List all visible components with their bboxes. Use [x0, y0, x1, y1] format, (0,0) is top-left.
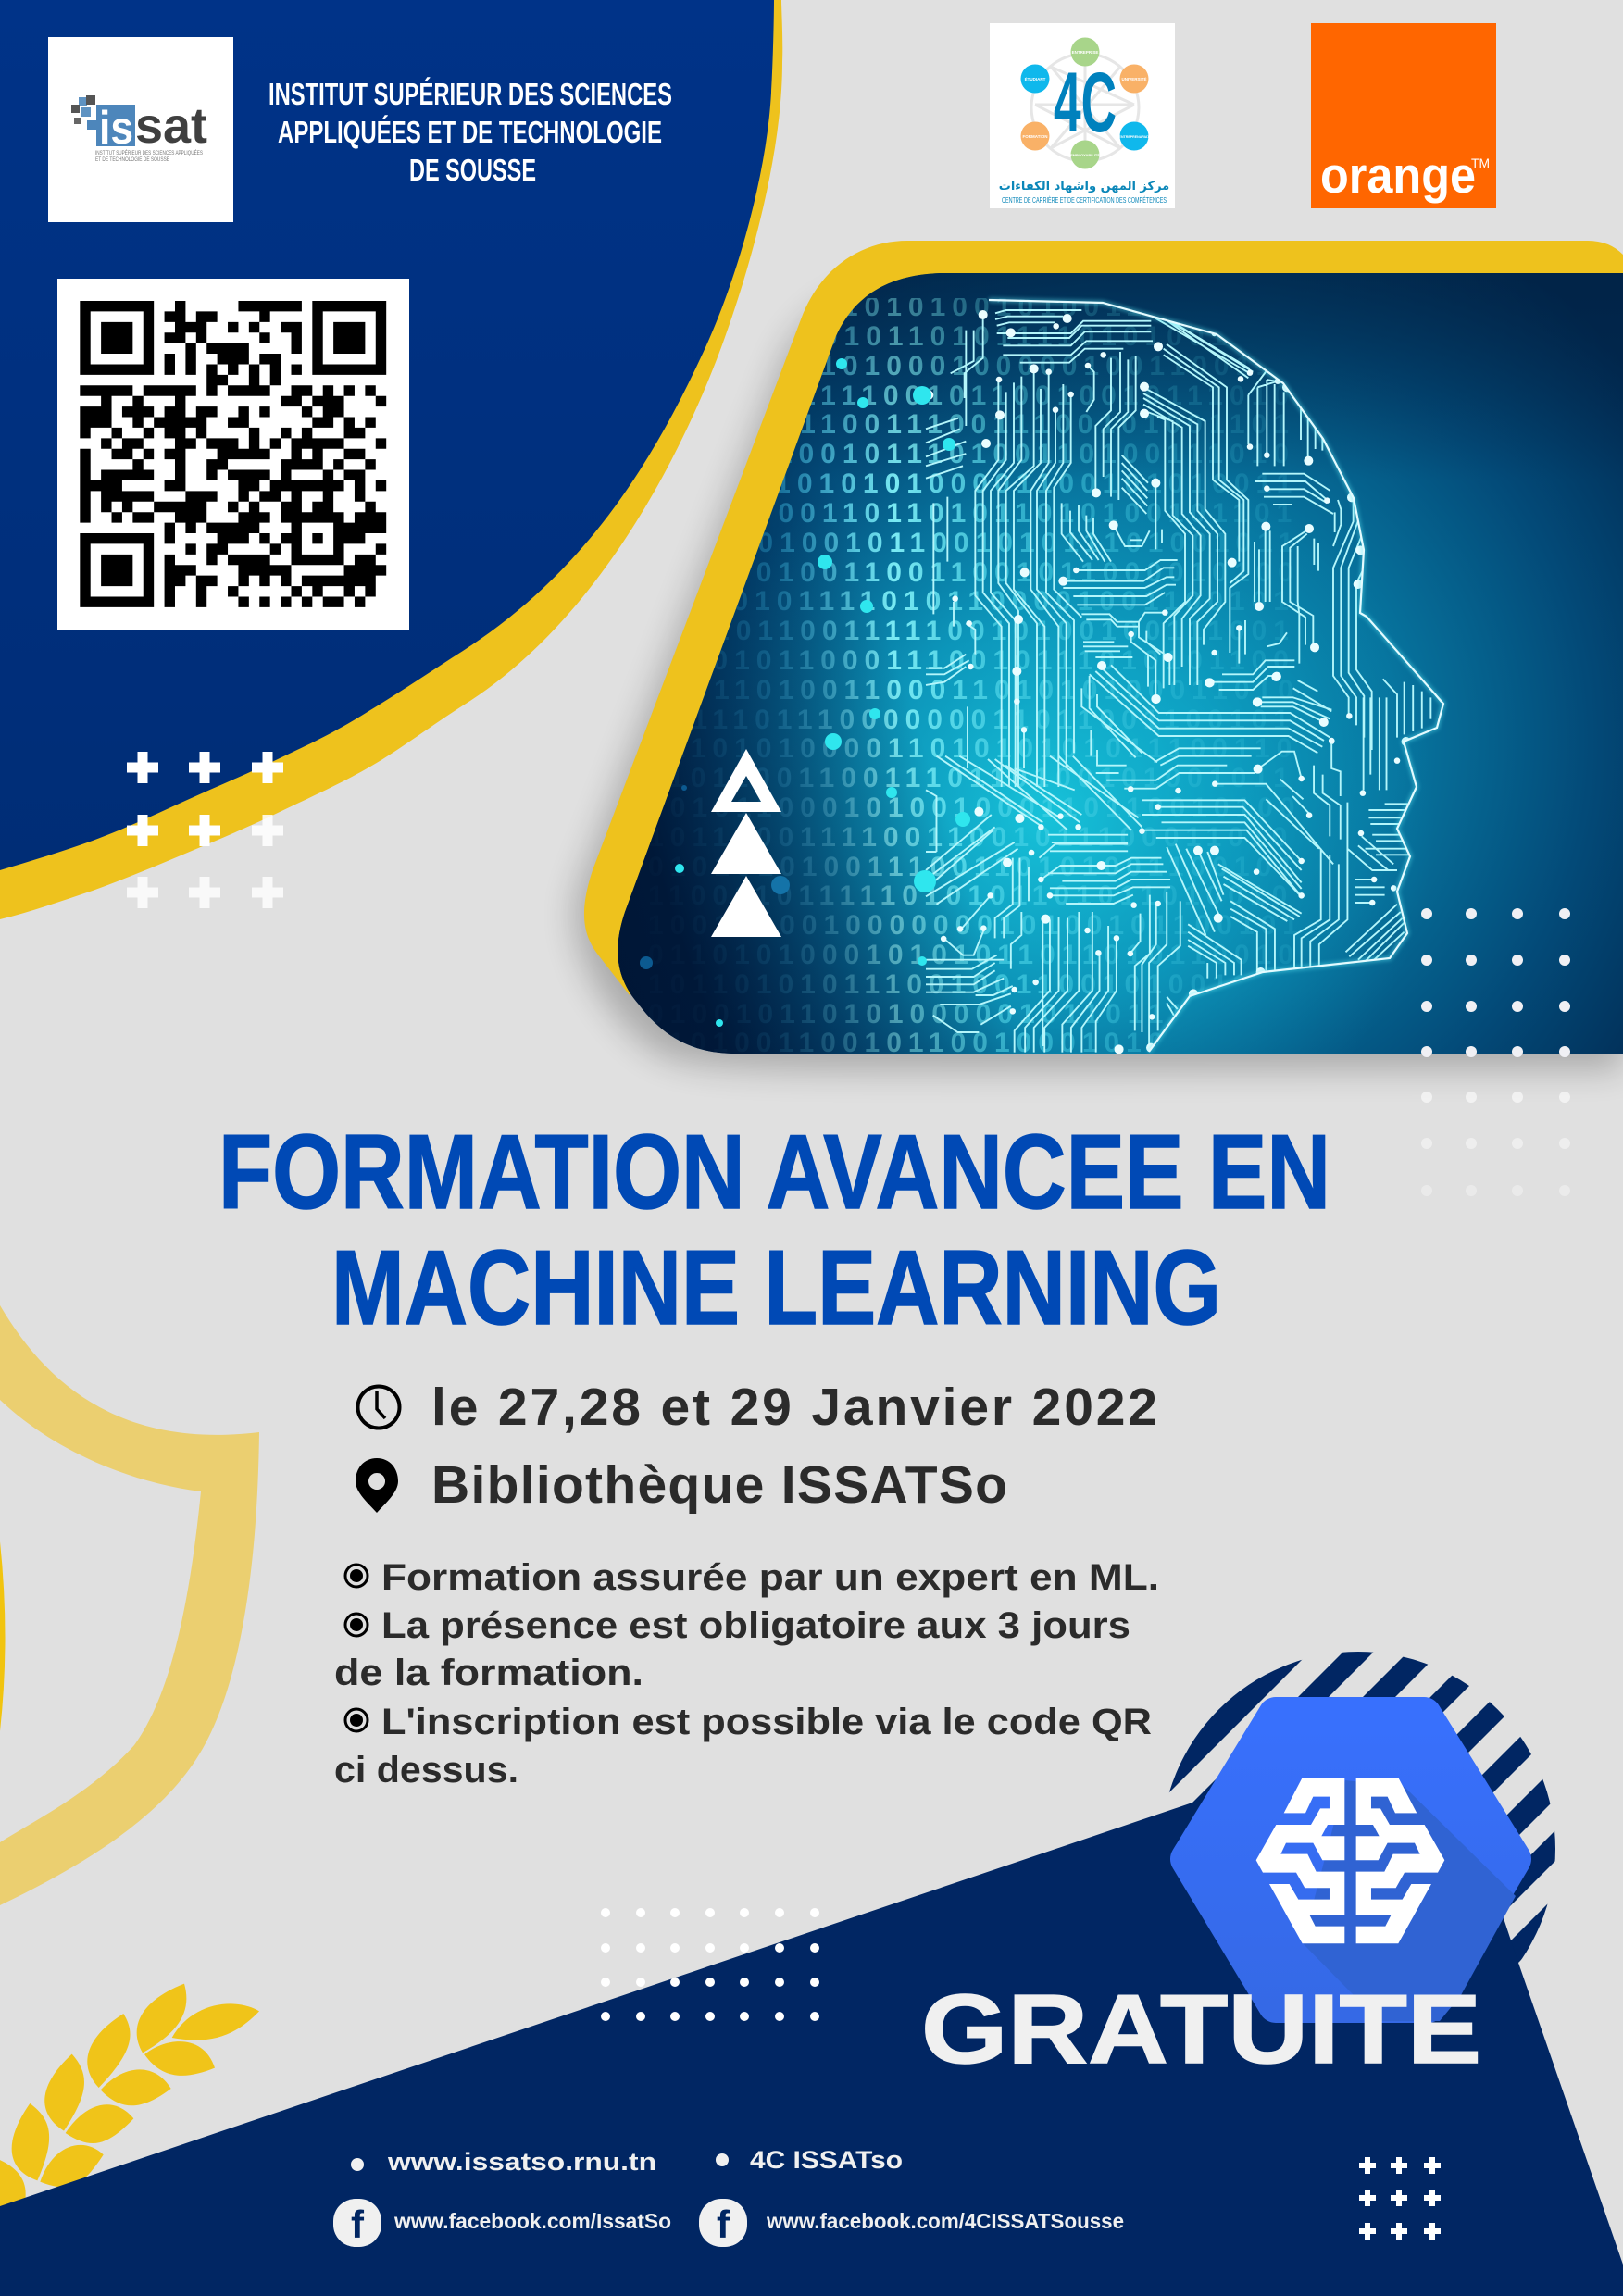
- icon: brain badge: [1188, 1715, 1516, 2021]
- 4C name: 4C ISSATso: [750, 2146, 903, 2174]
- cyan particles: [640, 358, 970, 1027]
- 4C logo: UNIVERSITÉ: [1121, 75, 1147, 81]
- binary digits background: 101101100101110100110100111010: [648, 439, 1295, 469]
- binary digits background: 110010110001110010111010101100: [648, 645, 1295, 676]
- binary digits background: 001011011110010110010010111010: [648, 381, 1295, 411]
- 4C logo: ENTREPRISE: [1072, 50, 1098, 55]
- binary digits background: 101101010111001001100101001101: [648, 969, 1298, 1000]
- facebook link 2: www.facebook.com/4CISSATSousse: [766, 2209, 1124, 2233]
- info list: ci dessus.: [334, 1750, 518, 1791]
- 4C logo: CENTRE DE CARRIÈRE ET DE CERTIFICATION DES COMPÉTENCES: [1002, 195, 1167, 205]
- binary digits background: 110100011010001000001001100110: [648, 351, 1300, 381]
- binary digits background: 010110100110001101010100011010: [648, 675, 1300, 705]
- icon: location pin: [356, 1458, 398, 1513]
- 4C logo: ÉTUDIANT: [1025, 75, 1046, 81]
- icon: facebook 1: f: [351, 2202, 365, 2246]
- dot grid, right of image: [1421, 908, 1570, 1196]
- 4C logo: ENTREPRENARIAT: [1119, 135, 1150, 139]
- info list: de la formation.: [334, 1653, 643, 1693]
- binary digits background: 011101011110101100001001100101: [648, 586, 1295, 617]
- icon: facebook 1: [333, 2199, 381, 2247]
- binary digits background: 110011011111010101101011010010: [648, 880, 1293, 911]
- bullet 2: [345, 1614, 368, 1636]
- date: le 27,28 et 29 Janvier 2022: [431, 1378, 1157, 1437]
- facebook link 1: www.facebook.com/IssatSo: [393, 2209, 671, 2233]
- shadow around image panel: [575, 291, 1623, 1070]
- info list: [334, 1557, 1159, 1791]
- binary digits background: 100101001000000010100101100101: [648, 910, 1305, 941]
- icon: facebook 2: [699, 2199, 747, 2247]
- dot grid, middle bottom: [601, 1908, 819, 2021]
- 4C bullet: [716, 2153, 729, 2166]
- info list: L'inscription est possible via le code QR: [381, 1702, 1152, 1742]
- binary digits background: 010101010011100110101001100101: [648, 852, 1300, 882]
- Orange logo: [1311, 23, 1496, 208]
- triangles: [711, 749, 781, 937]
- binary digits background: 010010110101000001011011100101: [648, 999, 1300, 1029]
- binary digits background: 011010100010101011011010110010: [648, 940, 1300, 970]
- binary digits background: [648, 292, 1305, 1058]
- ISSAT logo: is: [99, 102, 133, 154]
- GRATUITE label: GRATUITE: [921, 1975, 1481, 2084]
- title: FORMATION AVANCEE EN: [218, 1114, 1330, 1231]
- location: Bibliothèque ISSATSo: [431, 1455, 1007, 1515]
- icon: clock: [357, 1387, 400, 1428]
- ISSAT logo: [48, 37, 233, 222]
- binary digits background: 001011000101001000110110010100: [648, 792, 1302, 823]
- 4C logo: EMPLOYABILITÉ: [1070, 153, 1100, 157]
- binary digits background: 100101100111110010100100111001: [648, 616, 1295, 646]
- Orange logo: TM: [1471, 156, 1490, 170]
- binary digits background: 101100100110011001011000010100: [648, 557, 1300, 588]
- institute name heading: [268, 77, 672, 187]
- ISSAT logo: sat: [135, 98, 207, 154]
- image panel: AI head on binary background: [593, 259, 1623, 1065]
- top-left blue shape with yellow border: [0, 0, 782, 919]
- glow behind head outline: [989, 300, 1443, 1052]
- striped circle behind the badge: [1168, 1652, 1555, 1963]
- ISSAT logo: ET DE TECHNOLOGIE DE SOUSSE: [95, 157, 169, 163]
- circuit traces inside head: [926, 310, 1442, 1053]
- decorative yellow sliver, left edge: [0, 1541, 6, 1731]
- icon: facebook 2: f: [717, 2202, 730, 2246]
- title: MACHINE LEARNING: [331, 1229, 1221, 1347]
- ISSAT logo: INSTITUT SUPÉRIEUR DES SCIENCES APPLIQUÉES: [95, 150, 203, 156]
- binary digits background: 101110111000000011011001100101: [648, 705, 1295, 735]
- website bullet: [351, 2158, 364, 2171]
- bullet 3: [345, 1709, 368, 1731]
- navy bottom shape: [0, 1741, 1623, 2296]
- icon: wheat branch: [0, 1984, 259, 2210]
- institute name heading: DE SOUSSE: [409, 153, 536, 187]
- institute name heading: APPLIQUÉES ET DE TECHNOLOGIE: [278, 115, 662, 149]
- Orange logo: orange: [1320, 146, 1476, 204]
- 4C logo: مركز المهن واشهاد الكفاءات: [999, 180, 1169, 193]
- binary digits background: 101100101101010010100110101101: [648, 292, 1300, 322]
- info list: Formation assurée par un expert en ML.: [381, 1557, 1159, 1598]
- binary digits background: 011010100001101010101011100110: [648, 733, 1298, 764]
- binary digits background: 010110100101101011110101001101: [648, 321, 1297, 352]
- decorative shield outline, left: [0, 1305, 259, 1905]
- binary digits background: 110110011001110110100101001011: [648, 763, 1295, 793]
- binary digits background: 010010100101100101011101001011: [648, 528, 1300, 558]
- QR code: [57, 279, 409, 630]
- image panel yellow frame: [584, 241, 1623, 995]
- website: www.issatso.rnu.tn: [387, 2148, 656, 2176]
- 4C logo: 4C: [1054, 56, 1117, 150]
- bullet 1: [345, 1565, 368, 1587]
- info list: La présence est obligatoire aux 3 jours: [381, 1605, 1130, 1646]
- title: [218, 1114, 1330, 1347]
- binary digits background: 110100110010110010001010110101: [648, 1028, 1300, 1058]
- head outline: [989, 300, 1443, 1052]
- binary digits background: 101100011110011001011100011010: [648, 822, 1293, 853]
- 4C logo: FORMATION: [1023, 134, 1047, 139]
- binary digits background: 110010011001110011100101001101: [648, 409, 1295, 440]
- binary digits background: 100110001101101011010100101101: [648, 498, 1298, 529]
- 4C logo: [990, 23, 1175, 208]
- binary digits background: 011101101010100001100101010011: [648, 468, 1298, 499]
- plus-sign grid, top-left: [127, 752, 283, 908]
- institute name heading: INSTITUT SUPÉRIEUR DES SCIENCES: [268, 77, 672, 111]
- plus-sign grid, bottom right: [1359, 2157, 1441, 2240]
